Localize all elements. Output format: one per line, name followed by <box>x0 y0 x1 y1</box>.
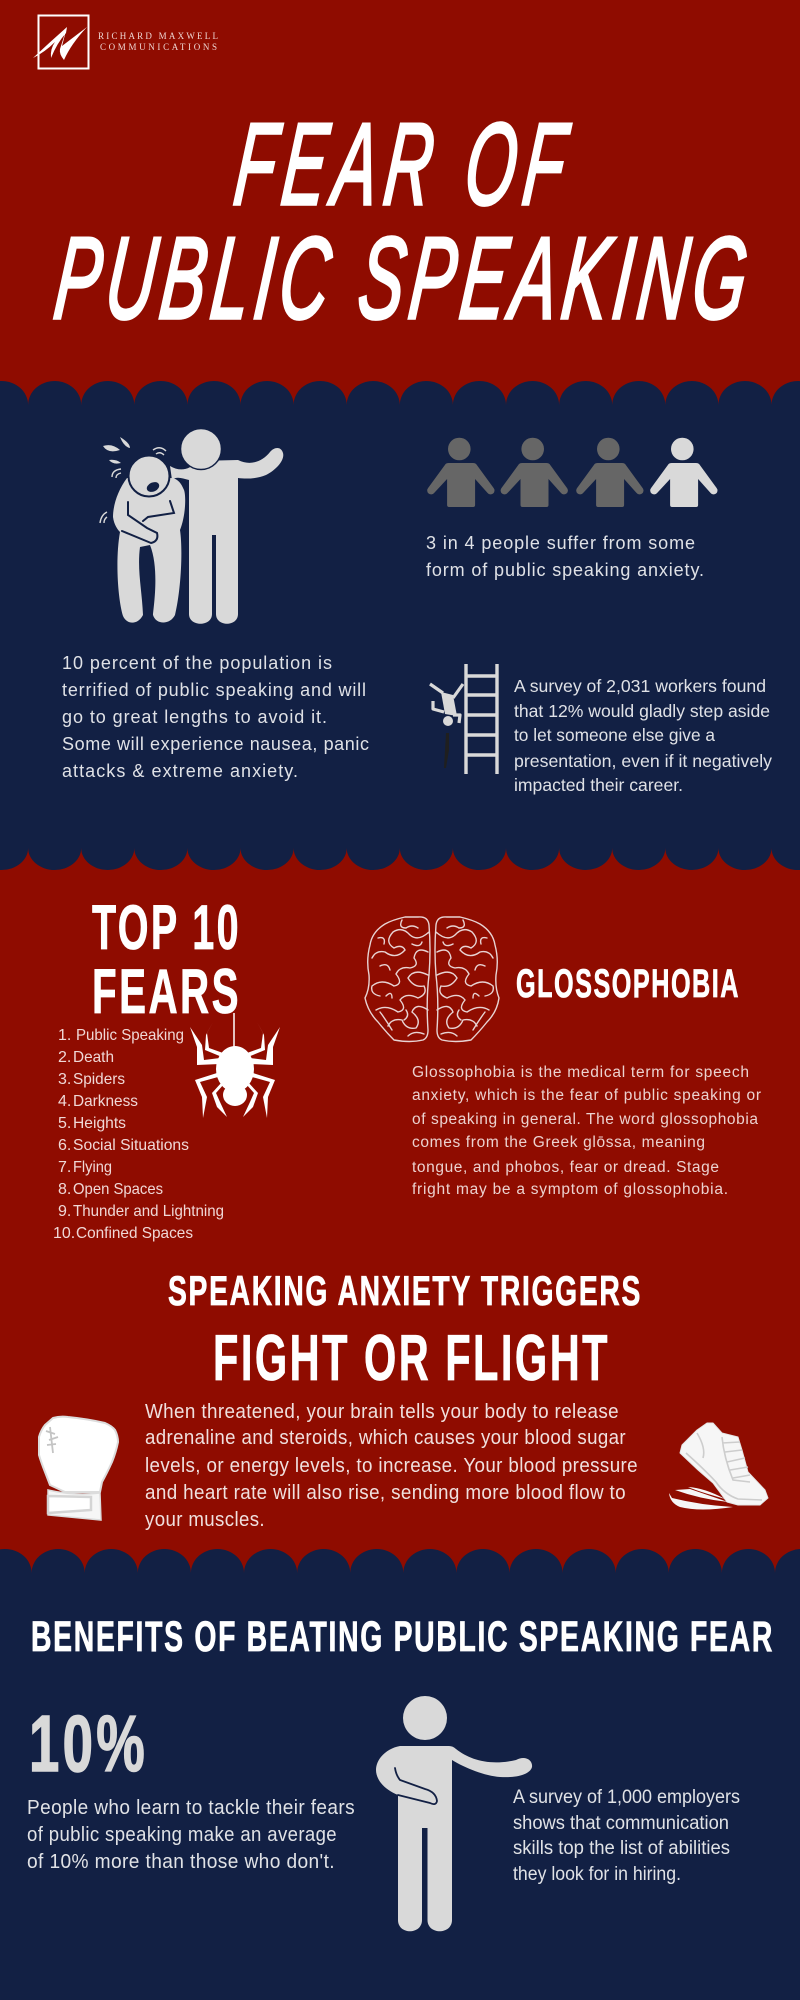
title <box>49 99 759 343</box>
list: top ten fears: 4. <box>58 1093 71 1110</box>
heading: top 10 fears: TOP 10 <box>92 893 241 963</box>
text: ten percent: attacks & extreme anxiety. <box>62 761 298 781</box>
text: survey of workers: impacted their career. <box>514 775 683 795</box>
text: fight or flight explanation: adrenaline and steroids, which causes your blood sugar <box>145 1427 626 1449</box>
stat: ten percent: 10% <box>29 1699 148 1788</box>
icon: frightened person being comforted <box>100 428 283 624</box>
list: top ten fears: Social Situations <box>73 1137 189 1154</box>
icon: person falling from ladder <box>430 664 497 774</box>
text: fight or flight explanation <box>145 1401 638 1531</box>
text: fight or flight explanation: and heart rate will also rise, sending more blood flow to <box>145 1482 626 1504</box>
list: top ten fears: Public Speaking <box>76 1027 184 1044</box>
logo: COMMUNICATIONS <box>100 42 217 52</box>
text: fight or flight explanation: levels, or energy levels, to increase. Your blood pressure <box>145 1455 638 1477</box>
icon: brain <box>365 917 499 1042</box>
text: glossophobia definition <box>412 1064 761 1198</box>
list: top ten fears: Death <box>73 1049 114 1066</box>
heading: top 10 fears <box>92 893 241 1027</box>
list: top ten fears: Darkness <box>73 1093 138 1110</box>
text: employers survey: they look for in hiring. <box>513 1864 681 1885</box>
list: top ten fears: Confined Spaces <box>76 1225 193 1242</box>
text: glossophobia definition: tongue, and phobos, fear or dread. Stage <box>412 1159 719 1176</box>
list: top ten fears: 1. <box>58 1027 71 1044</box>
text: glossophobia definition: comes from the Greek glōssa, meaning <box>412 1134 705 1151</box>
list: top ten fears: 7. <box>58 1159 71 1176</box>
text: survey of workers: to let someone else give a <box>514 725 715 745</box>
text: employers survey <box>513 1787 740 1885</box>
list: top ten fears: Spiders <box>73 1071 125 1088</box>
icon: spider <box>190 1013 280 1118</box>
list: top ten fears: 9. <box>58 1203 71 1220</box>
text: three in four: 3 in 4 people suffer from some <box>426 533 695 553</box>
list: top ten fears: 3. <box>58 1071 71 1088</box>
text: glossophobia definition: fright may be a symptom of glossophobia. <box>412 1181 728 1198</box>
text: survey of workers: presentation, even if it negatively <box>514 751 772 771</box>
text: survey of workers: that 12% would gladly step aside <box>514 701 770 721</box>
text: ten percent: Some will experience nausea, panic <box>62 734 369 754</box>
text: earnings benefit: People who learn to tackle their fears <box>27 1797 355 1819</box>
text: employers survey: skills top the list of abilities <box>513 1838 730 1859</box>
text: earnings benefit: of 10% more than those who don't. <box>27 1851 335 1873</box>
text: earnings benefit <box>27 1797 355 1873</box>
icon: boxing glove <box>39 1417 118 1520</box>
text: ten percent: 10 percent of the population is <box>62 653 332 673</box>
list: top ten fears: 2. <box>58 1049 71 1066</box>
text: three in four <box>426 533 704 580</box>
list: top ten fears <box>53 1027 224 1242</box>
panel: header <box>0 0 800 405</box>
icon: running shoe <box>669 1423 768 1510</box>
text: glossophobia definition: anxiety, which is the fear of public speaking or <box>412 1087 761 1104</box>
text: three in four: form of public speaking anxiety. <box>426 560 704 580</box>
list: top ten fears: Thunder and Lightning <box>73 1203 224 1220</box>
panel: anxiety statistics <box>0 381 800 870</box>
list: top ten fears: 8. <box>58 1181 71 1198</box>
heading: top 10 fears: FEARS <box>92 957 241 1027</box>
text: glossophobia definition: of speaking in general. The word glossophobia <box>412 1111 758 1128</box>
text: earnings benefit: of public speaking make an average <box>27 1824 337 1846</box>
logo: RICHARD MAXWELL <box>98 31 218 41</box>
text: ten percent: go to great lengths to avoid it. <box>62 707 327 727</box>
icon: three in four people <box>427 438 717 507</box>
text: ten percent: terrified of public speaking and will <box>62 680 366 700</box>
text: glossophobia definition: Glossophobia is the medical term for speech <box>412 1064 749 1081</box>
icon: presenting person <box>376 1696 532 1931</box>
list: top ten fears: 6. <box>58 1137 71 1154</box>
panel: fears and glossophobia <box>0 870 800 1550</box>
list: top ten fears: 10. <box>53 1225 75 1242</box>
text: employers survey: shows that communication <box>513 1813 729 1834</box>
list: top ten fears: Open Spaces <box>73 1181 163 1198</box>
text: fight or flight explanation: When threatened, your brain tells your body to release <box>145 1401 619 1423</box>
text: survey of workers: A survey of 2,031 workers found <box>514 676 766 696</box>
text: survey of workers <box>514 676 772 795</box>
text: employers survey: A survey of 1,000 employers <box>513 1787 740 1808</box>
list: top ten fears: 5. <box>58 1115 71 1132</box>
list: top ten fears: Flying <box>73 1159 112 1176</box>
panel: benefits <box>0 1549 800 2000</box>
text: ten percent <box>62 653 369 781</box>
list: top ten fears: Heights <box>73 1115 126 1132</box>
logo <box>33 16 218 68</box>
text: fight or flight explanation: your muscles. <box>145 1509 265 1531</box>
